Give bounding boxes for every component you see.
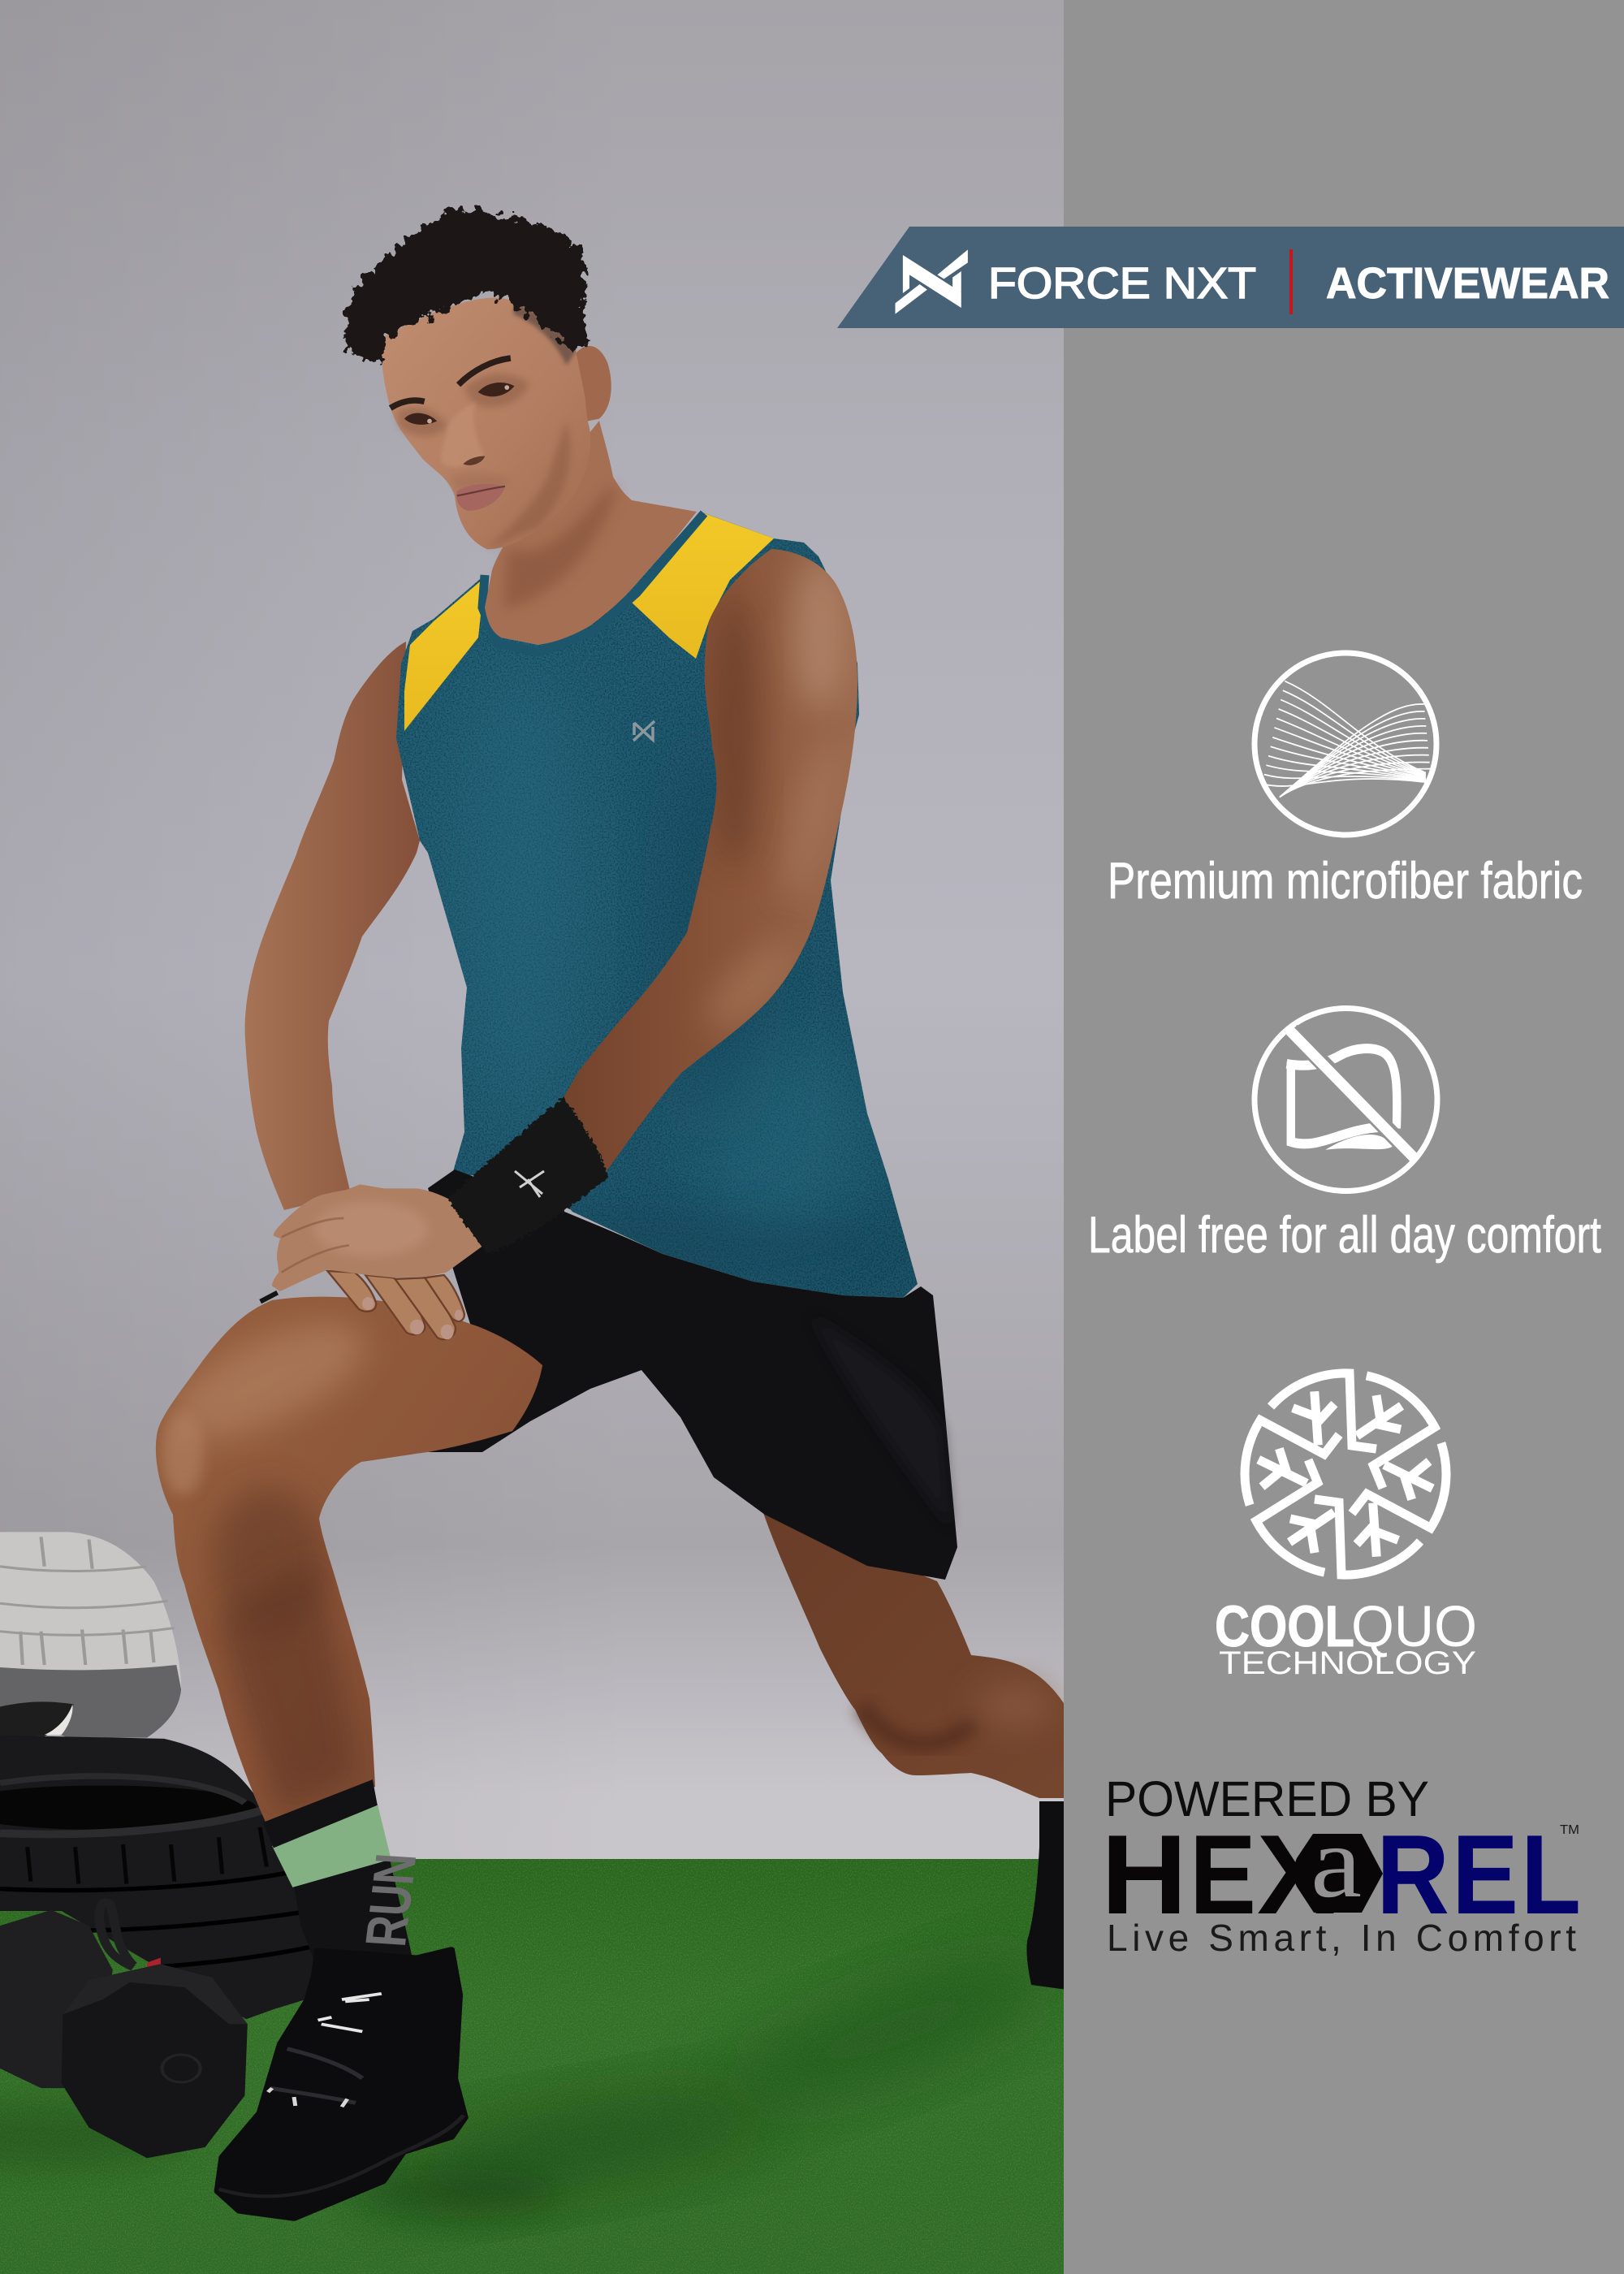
hexarel logo: X [1257,1812,1335,1938]
hexarel logo: H [1101,1812,1187,1938]
hair fade [513,302,576,365]
jaw shadow [487,421,570,549]
front thigh and shin [155,1297,542,1827]
sock [263,1779,429,1990]
hexagon mark [1291,1834,1383,1913]
back leg and shoe [762,1511,1068,1990]
shirt collar trim [482,513,704,652]
head [345,209,611,549]
eyebrows [391,358,511,408]
nose [441,403,485,467]
ear [576,346,611,421]
mouth shadow [450,473,511,491]
photo background wall [0,0,1064,2274]
neck shadow [503,487,617,609]
wristband [449,1097,608,1254]
banner product line: ACTIVEWEAR [1326,259,1609,308]
dumbbell [0,1902,248,2158]
tank top shirt [390,504,926,1308]
finger nails [362,1297,463,1339]
wristband logo [515,1171,544,1197]
front shoe [218,1949,465,2219]
right yellow shoulder panel [629,513,774,659]
banner divider [1289,249,1293,314]
sock cuff [263,1779,378,1848]
coolquo logotype: QUO [1351,1595,1477,1659]
tagline: Live Smart, In Comfort [1107,1917,1576,1959]
grey side panel [1064,0,1624,2274]
lower fingers [327,1271,464,1339]
hexarel logo: E [1190,1812,1256,1938]
lips [456,484,505,511]
hand and fingers [261,1184,482,1339]
hand highlight [314,1202,428,1256]
sock lettering: RUN [354,1852,429,1948]
face [382,298,590,549]
hexarel logo: L [1521,1812,1581,1938]
shorts [428,1169,957,1580]
eye socket shadow [396,374,529,436]
curly hair [345,209,590,365]
coolquo logotype [1215,1595,1477,1681]
shoe logo marks [318,1994,382,2031]
white tyre [0,1532,181,1738]
left yellow shoulder panel [404,577,485,731]
brand banner [837,227,1624,328]
hexarel logo: TM [1560,1823,1579,1837]
hexarel logo [1101,1806,1581,1938]
artificial grass floor [0,1859,1077,2274]
neck and chest skin [485,421,697,645]
brand logo [895,249,968,314]
hexarel logo: a [1311,1806,1362,1919]
powered by text: POWERED BY [1105,1771,1429,1827]
hexarel logo: R [1376,1812,1449,1938]
hexarel logo: E [1452,1812,1518,1938]
eyes [404,413,437,425]
icon: label free [1255,1009,1437,1191]
brand name: FORCE NXT [988,259,1256,308]
icon: microfiber fabric [1255,653,1436,835]
back shoe [1026,1801,1068,1990]
black tyre [0,1736,322,2019]
left arm [245,642,420,1210]
icon: snowflake [1221,1359,1470,1589]
back of hand [272,1184,482,1291]
drawcord tip [261,1293,278,1302]
coolquo logotype: COOL [1215,1595,1354,1659]
sock stripe [272,1804,391,1887]
coolquo logotype: TECHNOLOGY [1219,1645,1476,1681]
right arm [564,549,857,1177]
shirt chest logo [633,721,654,741]
